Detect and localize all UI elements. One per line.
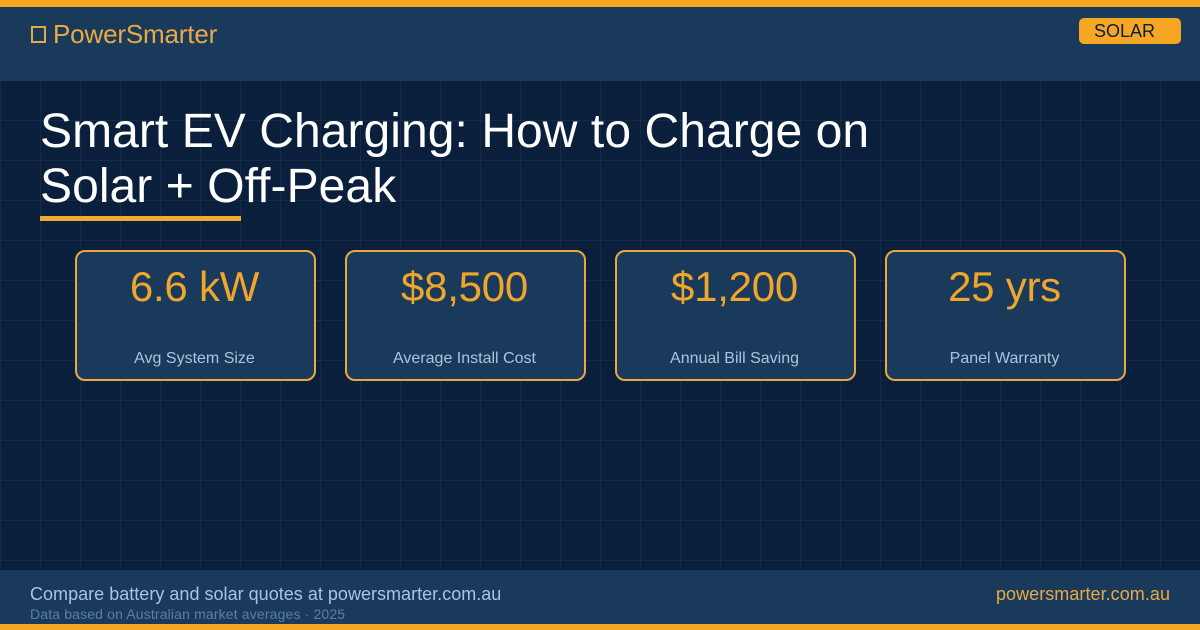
value: $1,200 — [671, 263, 798, 310]
title: Smart EV Charging: How to Charge on — [40, 105, 869, 158]
icon: missing-glyph logo box — [31, 26, 46, 43]
label: Panel Warranty — [950, 350, 1059, 367]
stat card: warranty — [885, 250, 1126, 381]
category badge — [1079, 18, 1181, 44]
top accent bar — [0, 0, 1200, 7]
value: 25 yrs — [948, 263, 1061, 310]
value: 6.6 kW — [130, 263, 259, 310]
value: $8,500 — [401, 263, 528, 310]
footer band — [0, 570, 1200, 630]
header band — [0, 0, 1200, 81]
title — [40, 105, 869, 213]
data note: Data based on Australian market averages · 2025 — [30, 606, 345, 622]
label: Avg System Size — [134, 350, 255, 367]
footer url: powersmarter.com.au — [996, 584, 1170, 604]
label: Annual Bill Saving — [670, 350, 799, 367]
brand name: PowerSmarter — [53, 19, 217, 49]
call to action: Compare battery and solar quotes at powersmarter.com.au — [30, 584, 501, 604]
bottom accent bar — [0, 624, 1200, 630]
category badge: SOLAR — [1094, 21, 1155, 41]
stat card: bill saving — [615, 250, 856, 381]
title underline — [40, 216, 241, 221]
label: Average Install Cost — [393, 350, 536, 367]
title: Solar + Off-Peak — [40, 160, 396, 213]
stat card: system size — [75, 250, 316, 381]
stat card: install cost — [345, 250, 586, 381]
